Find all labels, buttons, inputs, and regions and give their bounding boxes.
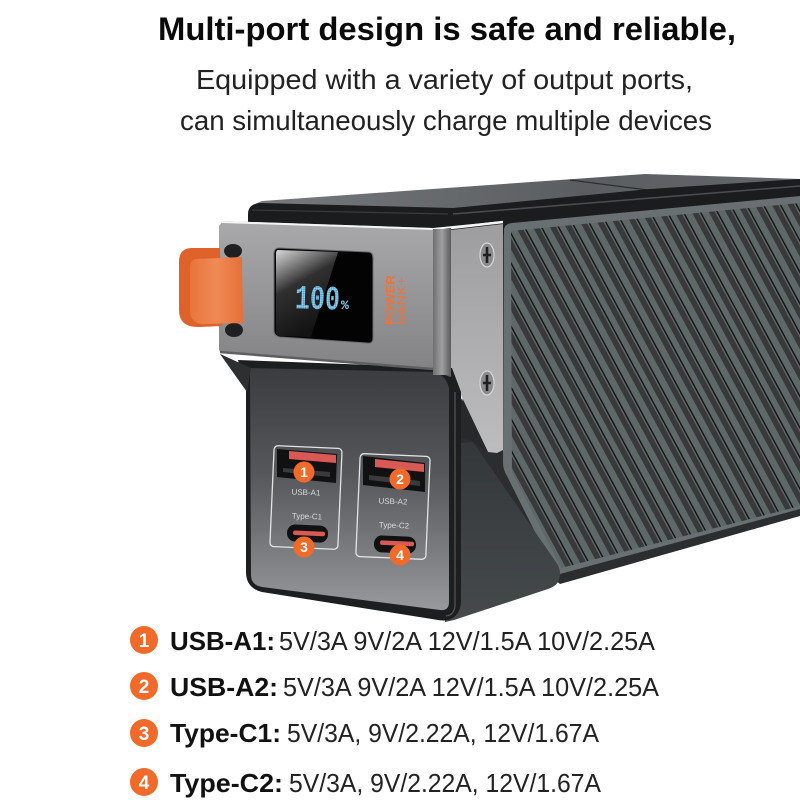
spec row 4: 4	[139, 773, 150, 794]
USB-A2 port	[363, 456, 425, 492]
front port panel	[238, 360, 461, 620]
screen glare	[276, 250, 338, 337]
label USB-A1: USB-A1	[291, 487, 321, 498]
brand label: POWER	[386, 274, 398, 325]
icon: screw bottom	[480, 371, 494, 395]
subtitle: can simultaneously charge multiple devices	[180, 105, 712, 136]
spec row 2: 5V/3A 9V/2A 12V/1.5A 10V/2.25A	[283, 672, 660, 702]
ribbed side panel	[461, 196, 800, 584]
display screen	[274, 248, 373, 343]
top face	[255, 174, 800, 209]
icon: screw top	[480, 243, 494, 267]
hole top	[224, 244, 242, 258]
spec row 3: 3	[139, 724, 149, 745]
title: Multi-port design is safe and reliable,	[158, 11, 736, 47]
side metal plate	[448, 222, 503, 453]
Type-C1 port	[287, 524, 328, 543]
spec row 1: 1	[139, 631, 150, 652]
spec row 4	[130, 768, 602, 798]
spec row 1: 5V/3A 9V/2A 12V/1.5A 10V/2.25A	[279, 626, 656, 656]
base foot	[445, 440, 560, 622]
spec row 3	[130, 718, 600, 748]
spec row 3: 5V/3A, 9V/2.22A, 12V/1.67A	[287, 718, 600, 748]
dark rim	[248, 179, 800, 300]
battery readout: 100	[294, 281, 341, 321]
spec row 4: 5V/3A, 9V/2.22A, 12V/1.67A	[289, 768, 602, 798]
brand label	[386, 274, 408, 325]
subtitle	[180, 64, 712, 136]
spec row 4: Type-C2:	[170, 768, 283, 798]
power bank product illustration	[179, 174, 800, 622]
orange strap	[179, 248, 243, 327]
badge 4: 4	[396, 547, 404, 563]
Type-C2 port	[374, 535, 416, 554]
percent sign: %	[341, 298, 349, 313]
brand label: BANK+	[396, 277, 408, 325]
spec row 2	[130, 672, 660, 702]
badge 3: 3	[300, 539, 308, 555]
port group: USB-A1 and Type-C1	[270, 446, 342, 558]
badge 2: 2	[396, 471, 404, 487]
subtitle: Equipped with a variety of output ports,	[196, 64, 693, 95]
label Type-C2: Type-C2	[379, 520, 410, 531]
spec row 2: USB-A2:	[170, 672, 278, 702]
port group: USB-A2 and Type-C2	[356, 454, 430, 566]
metal front plate	[219, 221, 503, 392]
badge 1: 1	[300, 464, 308, 480]
label Type-C1: Type-C1	[292, 511, 323, 522]
hole bottom	[225, 323, 243, 337]
USB-A1 port	[277, 449, 337, 483]
spec row 3: Type-C1:	[170, 718, 281, 748]
label USB-A2: USB-A2	[378, 496, 408, 507]
spec row 2: 2	[139, 677, 149, 698]
spec row 1: USB-A1:	[170, 626, 275, 656]
